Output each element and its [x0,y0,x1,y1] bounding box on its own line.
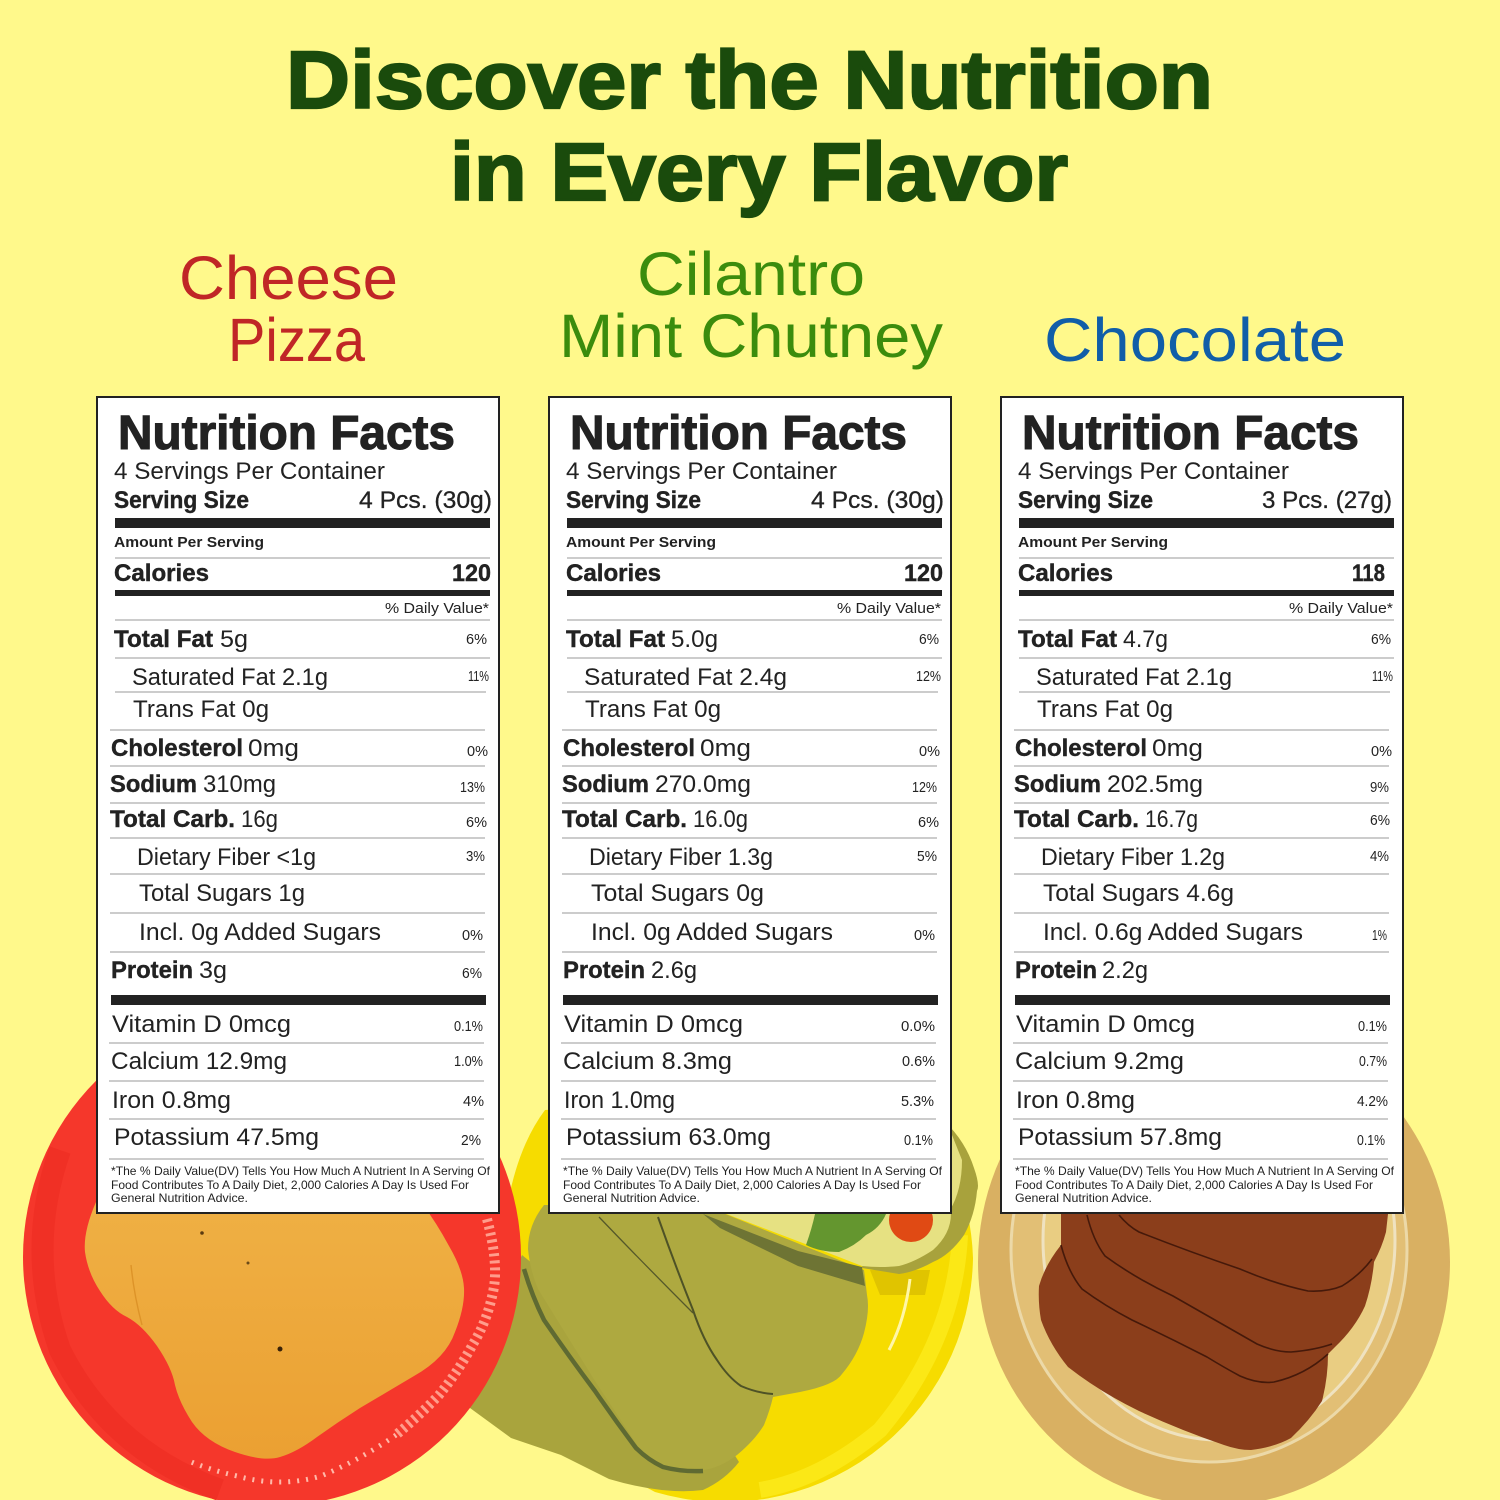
flavor heading: cheese pizza: Cheese [179,244,398,312]
calories block: 120 [452,560,491,587]
rows: nutrients: Trans Fat 0g [585,696,721,723]
flavor heading: chocolate: Chocolate [1044,306,1346,374]
rows: nutrients: 11% [468,669,489,685]
title [286,35,1213,218]
rows: nutrients: 0.1% [1357,1133,1385,1149]
calories block: % Daily Value* [385,600,489,617]
rows: nutrients: Total Fat [566,626,665,653]
rows: nutrients: 4% [1370,849,1389,865]
calories block: 120 [904,560,943,587]
calories block: Calories [566,560,661,587]
flavor heading: cilantro mint chutney [559,240,944,370]
rows: nutrients: 12% [916,669,941,685]
title: Discover the Nutrition [286,35,1213,126]
rows: nutrients: 0.0% [901,1019,935,1035]
rows: nutrients: Total Carb. [562,806,687,833]
rows: nutrients: Calcium 12.9mg [111,1048,287,1075]
rows: nutrients: 13% [460,780,485,796]
rows: nutrients: Cholesterol [111,735,243,762]
rows: nutrients: Total Sugars 4.6g [1043,880,1234,907]
calories block: 118 [1352,560,1385,587]
rows: nutrients: 6% [1371,632,1391,648]
rows: nutrients: 2.6g [651,957,697,984]
rows: nutrients: Vitamin D 0mcg [112,1011,291,1038]
flavor heading: cheese pizza: Pizza [228,306,365,374]
rows: nutrients: 3% [466,849,485,865]
calories block: % Daily Value* [837,600,941,617]
rows: nutrients: 0% [919,744,940,760]
rows: nutrients: Protein [1015,957,1097,984]
servings: 4 Servings Per Container [566,458,837,485]
footnote: Food Contributes To A Daily Diet, 2,000 Calories A Day Is Used For [563,1178,921,1192]
rows: nutrients: 0% [462,928,483,944]
footnote: *The % Daily Value(DV) Tells You How Much A Nutrient In A Serving Of [563,1164,943,1178]
rows: nutrients: 16.7g [1145,806,1198,833]
plate: chocolate crackers on tan plate [978,1018,1450,1500]
panel: chocolate nutrition facts [1001,397,1403,1213]
rows: nutrients: Calcium 8.3mg [563,1048,732,1075]
chutney dip [703,1130,962,1267]
rows: nutrients: 3g [199,957,227,984]
rows: nutrients: Total Fat [1018,626,1117,653]
rows: nutrients: Incl. 0.6g Added Sugars [1043,919,1303,946]
rows: nutrients: Potassium 63.0mg [566,1124,771,1151]
rows: nutrients: Trans Fat 0g [1037,696,1173,723]
calories block: Amount Per Serving [566,534,716,551]
servings: Serving Size [1018,487,1153,514]
rows: nutrients: Vitamin D 0mcg [1016,1011,1195,1038]
rows: nutrients: Total Carb. [1014,806,1139,833]
rows: nutrients: Protein [111,957,193,984]
panel: cilantro mint chutney nutrition facts [549,397,951,1213]
rows: nutrients: Dietary Fiber 1.2g [1041,844,1225,871]
panel: cheese pizza nutrition facts [97,397,499,1213]
rows: nutrients: 12% [912,780,937,796]
plate: cilantro crackers on yellow plate [460,1090,978,1500]
rows: nutrients: 5.0g [671,626,718,653]
calories block [566,518,943,620]
rows: nutrients: Incl. 0g Added Sugars [139,919,381,946]
rows: nutrients: Dietary Fiber 1.3g [589,844,773,871]
rows: nutrients: Total Carb. [110,806,235,833]
rows: nutrients: 4.2% [1357,1094,1388,1110]
rows: nutrients: 16.0g [693,806,748,833]
rows: nutrients: 2.2g [1102,957,1148,984]
calories block: Amount Per Serving [114,534,264,551]
servings: 4 Pcs. (30g) [811,487,944,514]
rows: nutrients: 0.1% [454,1019,483,1035]
footnote: *The % Daily Value(DV) Tells You How Much A Nutrient In A Serving Of [111,1164,491,1178]
calories block: Amount Per Serving [1018,534,1168,551]
rows: nutrients: 6% [466,632,487,648]
servings: 3 Pcs. (27g) [1262,487,1392,514]
rows: nutrients: Potassium 57.8mg [1018,1124,1222,1151]
rows: nutrients: 0% [1371,744,1392,760]
rows: nutrients: 270.0mg [655,771,751,798]
rows: nutrients [561,626,942,1159]
cracker: right, behind dip [862,1120,978,1274]
calories block: % Daily Value* [1289,600,1393,617]
rows: nutrients: 5.3% [901,1094,934,1110]
rows: nutrients: Vitamin D 0mcg [564,1011,743,1038]
rows: nutrients: Sodium [562,771,649,798]
footnote [563,1164,943,1205]
rows: nutrients: 6% [919,632,939,648]
servings [1018,458,1392,514]
rows: nutrients: 6% [466,815,487,831]
plate: cheese pizza cracker on red plate [23,1008,521,1500]
rows: nutrients: 0mg [248,735,299,762]
footnote: General Nutrition Advice. [111,1191,248,1205]
calories block [1018,518,1394,620]
rows: nutrients: 0.6% [902,1054,935,1070]
rows: nutrients: 11% [1372,669,1393,685]
footnote: *The % Daily Value(DV) Tells You How Much A Nutrient In A Serving Of [1015,1164,1395,1178]
rows: nutrients: Incl. 0g Added Sugars [591,919,833,946]
rows: nutrients: Sodium [1014,771,1101,798]
rows: nutrients: 2% [461,1133,481,1149]
rows: nutrients: Iron 0.8mg [1016,1087,1135,1114]
rows: nutrients: 0.7% [1359,1054,1387,1070]
rows: nutrients: 6% [918,815,939,831]
servings: Serving Size [566,487,701,514]
calories block [114,518,491,620]
footnote: General Nutrition Advice. [1015,1191,1152,1205]
panel heading: Nutrition Facts [118,407,455,460]
rows: nutrients: 4% [463,1094,484,1110]
rows: nutrients: 0.1% [904,1133,933,1149]
rows: nutrients: Total Fat [114,626,213,653]
tomato [889,1198,933,1242]
panel heading: Nutrition Facts [1022,407,1359,460]
servings: 4 Servings Per Container [114,458,385,485]
servings [566,458,944,514]
rows: nutrients: Saturated Fat 2.4g [584,664,787,691]
cracker: back [460,1255,739,1491]
rows: nutrients: 0% [467,744,488,760]
rows: nutrients: 5g [220,626,248,653]
rows: nutrients: 5% [917,849,937,865]
rows: nutrients: Protein [563,957,645,984]
calories block: Calories [114,560,209,587]
rows: nutrients: Dietary Fiber <1g [137,844,316,871]
rows: nutrients: Iron 1.0mg [564,1087,675,1114]
rows: nutrients: Calcium 9.2mg [1015,1048,1184,1075]
panel heading: Nutrition Facts [570,407,907,460]
rows: nutrients: Cholesterol [1015,735,1147,762]
flavor heading: cilantro mint chutney: Mint Chutney [559,302,944,370]
flavor heading: cheese pizza [179,244,398,374]
footnote: Food Contributes To A Daily Diet, 2,000 Calories A Day Is Used For [111,1178,469,1192]
rows: nutrients [109,626,490,1159]
footnote: General Nutrition Advice. [563,1191,700,1205]
rows: nutrients: 0mg [700,735,751,762]
cilantro leaf [806,1214,886,1252]
rows: nutrients: 4.7g [1123,626,1168,653]
servings: Serving Size [114,487,249,514]
footnote: Food Contributes To A Daily Diet, 2,000 Calories A Day Is Used For [1015,1178,1373,1192]
rows: nutrients: Saturated Fat 2.1g [1036,664,1232,691]
rows: nutrients: Potassium 47.5mg [114,1124,319,1151]
rows: nutrients: 1% [1372,928,1387,944]
rows: nutrients: Total Sugars 1g [139,880,305,907]
servings: 4 Servings Per Container [1018,458,1289,485]
rows: nutrients: 310mg [203,771,276,798]
cracker [85,1202,464,1459]
rows: nutrients [1013,626,1394,1159]
rows: nutrients: 6% [1370,813,1390,829]
rows: nutrients: Trans Fat 0g [133,696,269,723]
rows: nutrients: 202.5mg [1107,771,1203,798]
rows: nutrients: 0% [914,928,935,944]
rows: nutrients: 1.0% [454,1054,483,1070]
rows: nutrients: 0.1% [1358,1019,1387,1035]
rows: nutrients: Saturated Fat 2.1g [132,664,328,691]
rows: nutrients: 6% [462,966,482,982]
title: in Every Flavor [450,127,1068,218]
rows: nutrients: 16g [241,806,278,833]
rows: nutrients: Iron 0.8mg [112,1087,231,1114]
rows: nutrients: Sodium [110,771,197,798]
rows: nutrients: 9% [1370,780,1389,796]
shadow band [703,1214,865,1286]
calories block: Calories [1018,560,1113,587]
cracker: front [528,1205,868,1471]
rows: nutrients: Total Sugars 0g [591,880,764,907]
rows: nutrients: Cholesterol [563,735,695,762]
footnote [111,1164,491,1205]
servings [114,458,492,514]
footnote [1015,1164,1395,1205]
servings: 4 Pcs. (30g) [359,487,492,514]
rows: nutrients: 0mg [1152,735,1203,762]
flavor heading: cilantro mint chutney: Cilantro [637,240,865,308]
